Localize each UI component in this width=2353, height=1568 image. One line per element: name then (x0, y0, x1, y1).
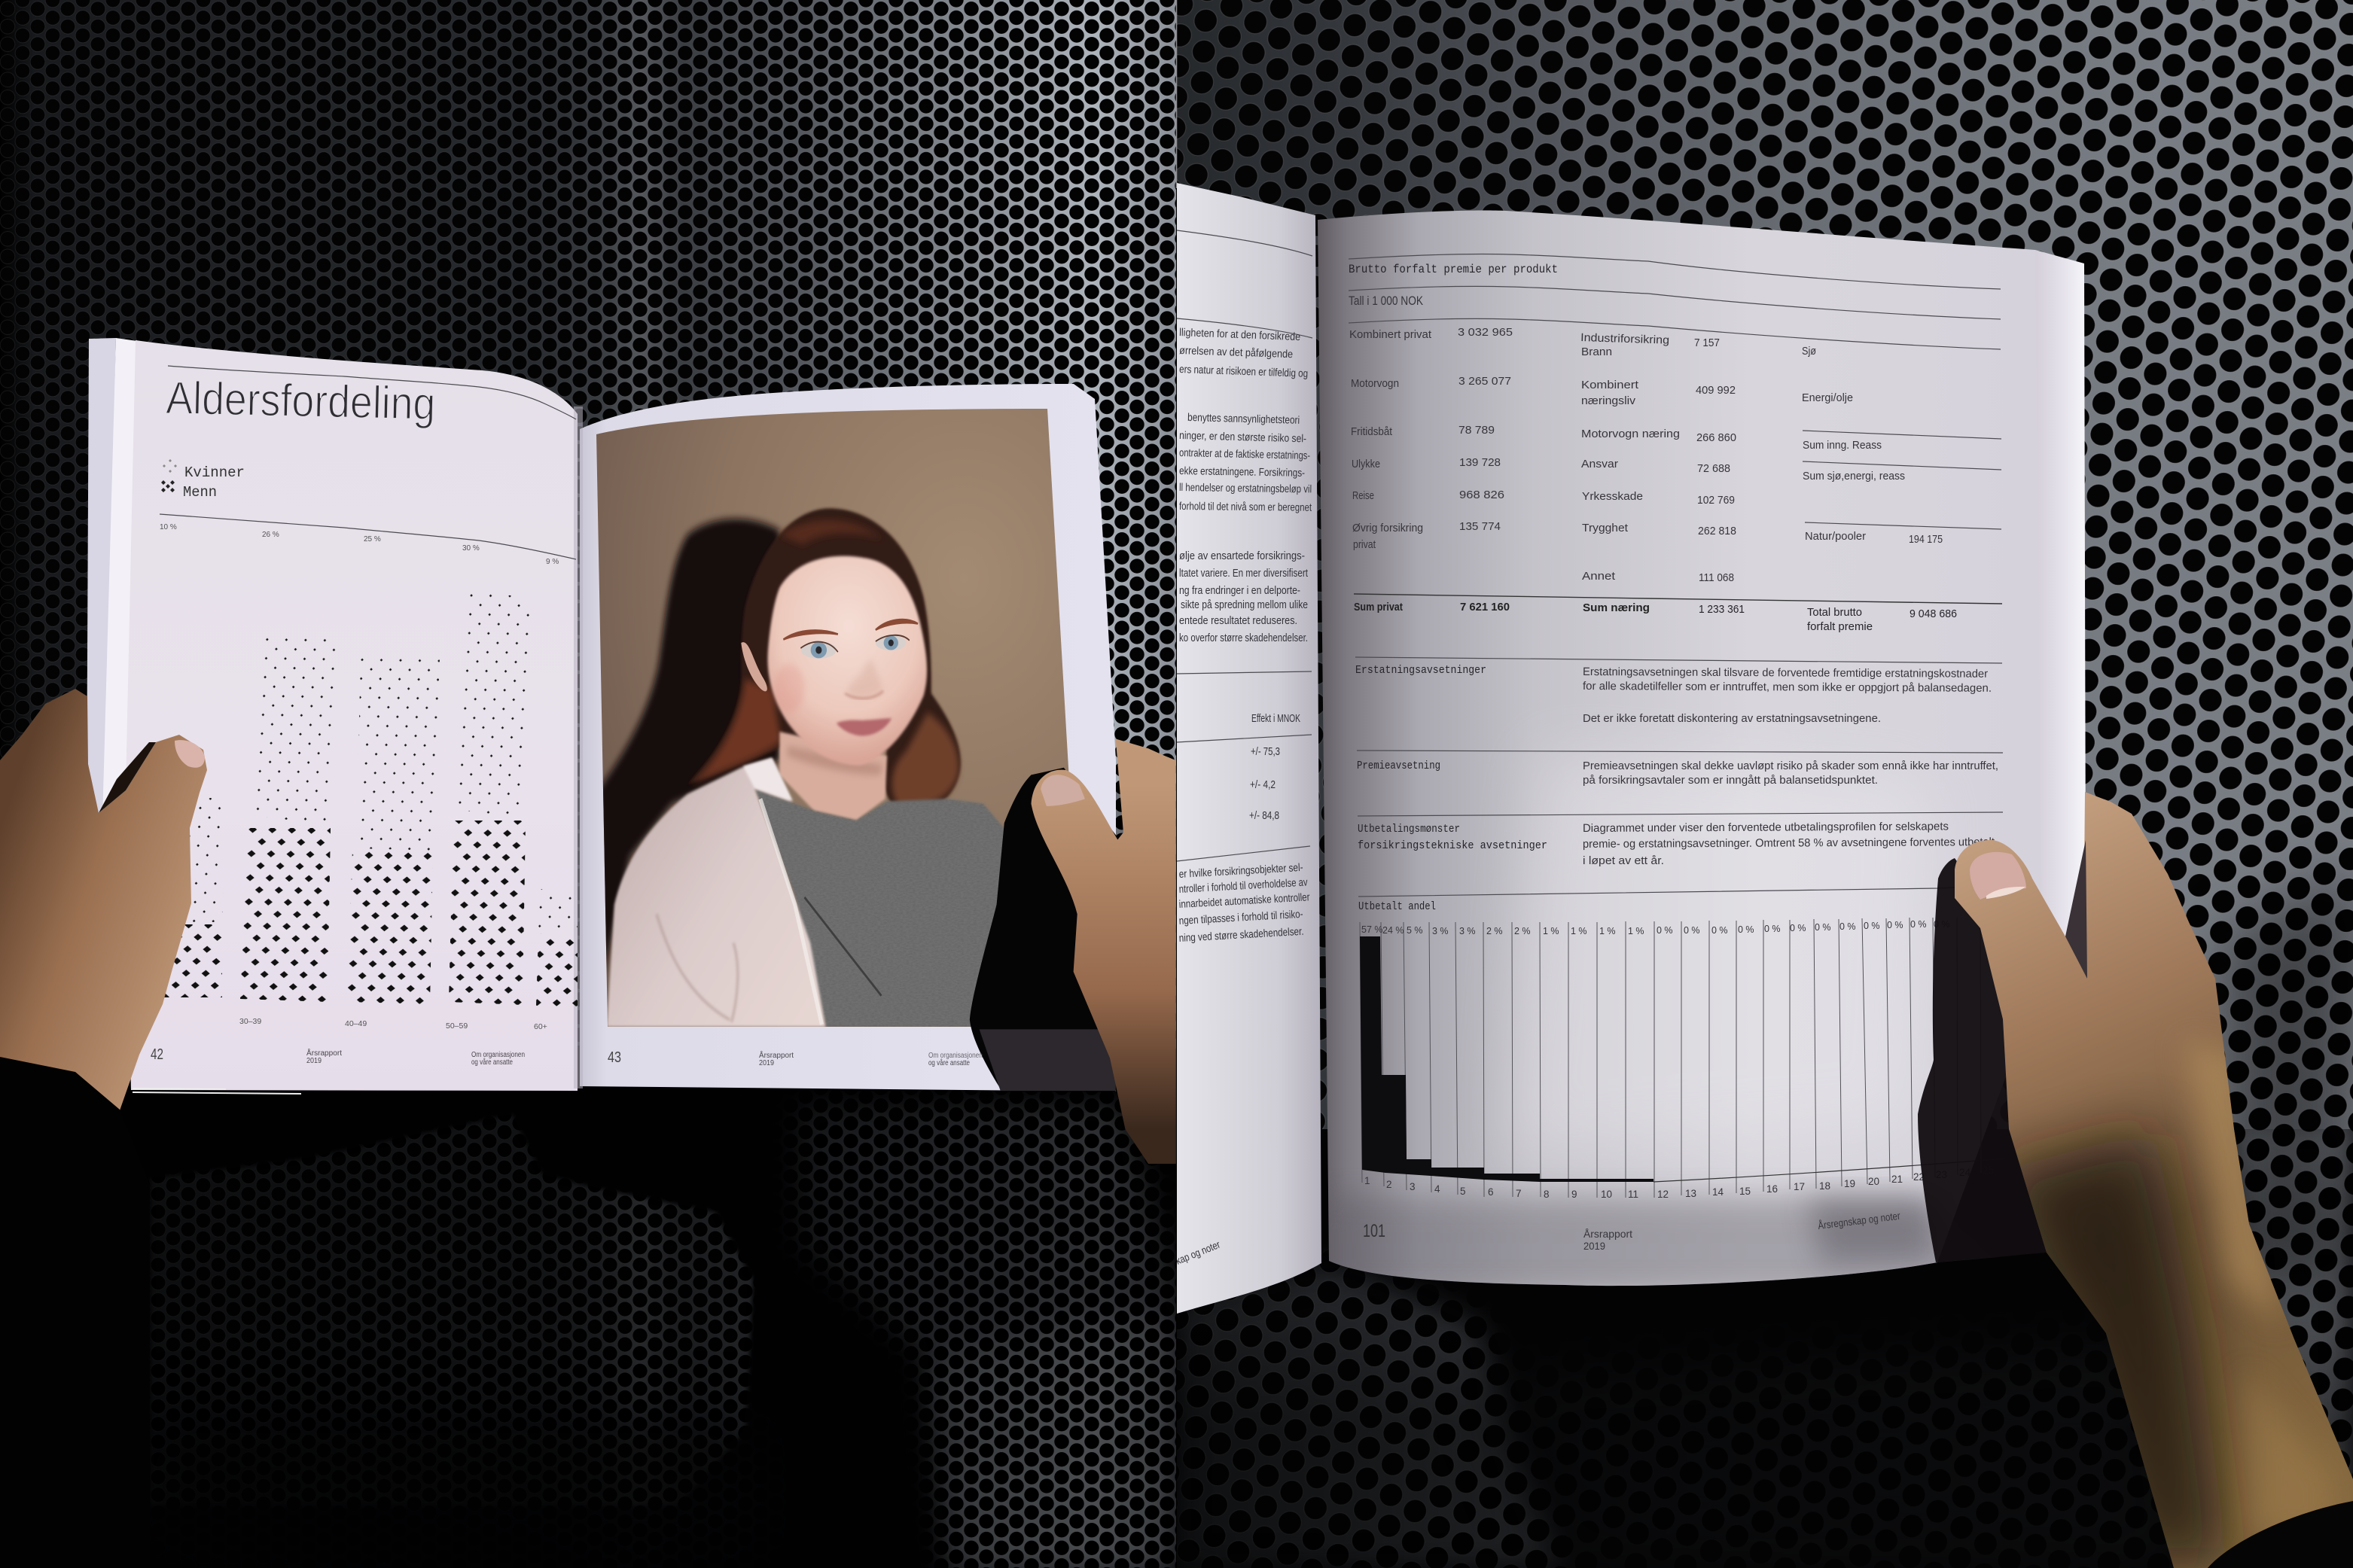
section: Premieavsetning: Premieavsetningen skal dekke uavløpt risiko på skader som ennå ikke har inntruffet, (1583, 760, 1998, 772)
thumbnail (175, 740, 205, 768)
hand: left hand holding book (0, 689, 207, 1568)
column: commercial products: 111 068 (1699, 571, 1734, 584)
year labels: 5 (1460, 1186, 1466, 1197)
text: risk paragraph fragments: ko overfor større skadehendelser. (1179, 632, 1308, 644)
share labels: 5 % (1407, 925, 1423, 936)
page stack right edge (2035, 250, 2086, 979)
gutter shadow (574, 406, 583, 1088)
column: commercial products: 1 233 361 (1699, 603, 1745, 616)
bar: 30-39 (240, 632, 338, 1002)
column: marine, energy, pools: forfalt premie (1807, 620, 1873, 633)
hand shadow on page 101 (1918, 858, 2047, 1262)
chart title: Utbetalt andel (1358, 900, 1436, 913)
background: perforated metal, right (1177, 0, 2353, 1568)
forearm shading (1988, 1039, 2334, 1568)
share labels: 0 % (1934, 919, 1950, 930)
share labels: 57 % (1361, 924, 1382, 935)
column: private products: Motorvogn (1351, 377, 1399, 390)
footer: page 101: Årsrapport (1583, 1228, 1632, 1240)
column: private products: Sum privat (1354, 601, 1403, 613)
table title: Brutto forfalt premie per produkt (1349, 263, 1558, 276)
section: Utbetalingsmønster: premie- og erstatningsavsetninger. Omtrent 58 % av avsetningene forventes utbetalt (1583, 836, 1995, 851)
table: effect in MNOK: +/- 75,3 (1251, 746, 1280, 758)
page bottom edge (133, 1088, 301, 1094)
table: effect in MNOK: Effekt i MNOK (1251, 713, 1300, 725)
year labels: 23 (1936, 1169, 1947, 1180)
legend (161, 459, 244, 496)
section: Utbetalingsmønster: Diagrammet under viser den forventede utbetalingsprofilen for selskapets (1583, 820, 1949, 835)
share labels: 0 % (1910, 919, 1927, 930)
bar: 60+ (536, 889, 578, 1006)
share labels: 0 % (1839, 921, 1856, 932)
finger fold behind page (2065, 840, 2087, 979)
text: risk paragraph fragments: ekke erstatningene. Forsikrings- (1179, 465, 1305, 480)
portrait photograph (580, 376, 1117, 1049)
column: marine, energy, pools: Energi/olje (1802, 391, 1853, 404)
table: effect in MNOK: +/- 4,2 (1250, 779, 1276, 791)
baseline right of bars (1654, 1158, 2005, 1182)
footer: page 43: Årsrapport (759, 1050, 794, 1060)
legend icon: Menn (161, 480, 175, 492)
bar: 50-59 (449, 589, 531, 1005)
heading: Aldersfordeling (166, 366, 576, 429)
column: private products: Reise (1352, 489, 1374, 502)
backdrop (580, 376, 1117, 1049)
arm and palm (1955, 792, 2353, 1568)
heading: Aldersfordeling: Aldersfordeling (166, 372, 436, 429)
column: commercial products: 266 860 (1696, 431, 1736, 444)
year labels: 6 (1488, 1186, 1494, 1198)
face (768, 556, 927, 766)
column: commercial products: Industriforsikring (1580, 331, 1669, 347)
table: effect in MNOK: +/- 84,8 (1249, 810, 1279, 822)
section: Premieavsetning (1357, 751, 2003, 787)
year labels: 13 (1685, 1188, 1696, 1199)
column: private products: 139 728 (1459, 456, 1501, 469)
vertical year lines (1360, 918, 1981, 1198)
column: private products: 968 826 (1459, 489, 1504, 501)
ear (741, 642, 767, 691)
neck (779, 732, 887, 821)
column: private products: 7 621 160 (1460, 601, 1510, 613)
footer: page 42: Årsrapport (306, 1048, 342, 1058)
sweater (754, 788, 1012, 1027)
share labels: 1 % (1628, 926, 1644, 936)
sleeve (0, 1057, 150, 1568)
year labels: 11 (1628, 1189, 1638, 1200)
section: Erstatningsavsetninger: for alle skadetilfeller som er inntruffet, men som ikke er oppgjort på balansedagen. (1583, 680, 1992, 695)
text: controls paragraph fragment: ning ved større skadehendelser. (1178, 926, 1304, 945)
column: private products: 135 774 (1459, 520, 1501, 533)
column: marine, energy, pools: Natur/pooler (1805, 530, 1866, 543)
hair (687, 508, 961, 812)
year labels: 14 (1712, 1186, 1724, 1198)
text: risk paragraph fragments: sikte på spredning mellom ulike (1181, 599, 1308, 611)
bar labels: 25 % (364, 535, 381, 543)
cardigan fold shading (657, 914, 738, 1022)
age axis labels: 50–59 (446, 1021, 468, 1031)
text: risk paragraph fragments: benyttes sannsynlighetsteori (1187, 412, 1300, 427)
collar (743, 758, 793, 801)
year labels: 2 (1386, 1179, 1392, 1190)
dot bar chart: age distribution (154, 514, 578, 1031)
book: previous page sliver (1174, 183, 1321, 1314)
bar: 40-49 (347, 654, 440, 1004)
panel: left photograph (0, 0, 1176, 1568)
footer: page 42: 42 (151, 1046, 163, 1063)
bar labels: 9 % (546, 558, 559, 566)
column: commercial products: 409 992 (1696, 384, 1736, 397)
hand: right hand holding portrait page (1031, 739, 1176, 1164)
section: Erstatningsavsetninger: Erstatningsavsetningen skal tilsvare de forventede fremtidige erstatningskostnader (1583, 665, 1988, 680)
share labels: 0 % (1764, 924, 1781, 934)
column: commercial products: Brann (1581, 346, 1612, 358)
thumb cast shadow (99, 742, 156, 813)
text: risk paragraph fragments: ørrelsen av det påfølgende (1179, 345, 1293, 361)
footer: page 101: 101 (1363, 1221, 1385, 1241)
age axis labels: 40–49 (345, 1019, 367, 1028)
black share bars (1360, 936, 1654, 1182)
year labels: 10 (1601, 1189, 1612, 1200)
footer: page 42: Om organisasjonen (471, 1051, 525, 1059)
cast shadow (599, 519, 779, 976)
column: commercial products: næringsliv (1581, 394, 1636, 407)
column: marine, energy, pools: Sum inng. Reass (1803, 439, 1882, 452)
legend: Kvinner (184, 464, 245, 481)
share labels: 0 % (1815, 922, 1831, 933)
year labels: 1 (1364, 1175, 1370, 1186)
section: Premieavsetning: på forsikringsavtaler som er inngått på balansetidspunktet. (1583, 774, 1878, 787)
sweater knit texture (754, 788, 1012, 1027)
text: risk paragraph fragments: ontrakter at de faktiske erstatnings- (1179, 447, 1310, 462)
panel: right photograph (1174, 0, 2353, 1568)
text: risk paragraph fragments: forhold til det nivå som er beregnet (1179, 501, 1312, 514)
column: commercial products: Ansvar (1581, 458, 1618, 470)
column: commercial products: 102 769 (1697, 494, 1735, 507)
footer: page 42: og våre ansatte (471, 1058, 513, 1067)
text: risk paragraph fragments: ltatet variere. En mer diversifisert (1179, 568, 1308, 580)
text: risk paragraph fragments: ninger, er den største risiko sel- (1179, 430, 1306, 445)
text: risk paragraph fragments: ll hendelser og erstatningsbeløp vil (1179, 482, 1312, 495)
table: effect in MNOK (1249, 713, 1300, 822)
year labels: 25 (1983, 1165, 1994, 1176)
column: marine, energy, pools: Sjø (1802, 345, 1816, 358)
cheek blush (774, 665, 804, 712)
footer: page 42 (151, 1046, 525, 1067)
column: private products (1349, 326, 1513, 613)
footer: page 43: Om organisasjonen (928, 1052, 983, 1060)
thumbnail (1970, 852, 2026, 900)
text: risk paragraph fragments: ers natur at risikoen er tilfeldig og (1179, 364, 1308, 380)
year labels: 15 (1739, 1186, 1751, 1197)
column: private products: 78 789 (1458, 424, 1495, 437)
bar chart: Utbetalt andel (1358, 885, 2005, 1200)
legend: Menn (183, 484, 217, 501)
bar labels: 26 % (262, 531, 279, 539)
text: risk paragraph fragments: entede resultatet reduseres. (1179, 615, 1297, 627)
page sheet (1318, 211, 2042, 1286)
text: controls paragraph fragment: er hvilke forsikringsobjekter sel- (1178, 862, 1303, 881)
column: commercial products (1580, 331, 1745, 616)
panel divider (1176, 0, 1178, 188)
age axis labels: 30–39 (239, 1017, 261, 1026)
section: Premieavsetning: Premieavsetning (1357, 760, 1440, 772)
column: private products: Øvrig forsikring (1352, 522, 1423, 534)
column: marine, energy, pools: Total brutto (1807, 606, 1862, 619)
age axis labels (239, 1017, 547, 1031)
table unit note: Tall i 1 000 NOK (1349, 294, 1424, 308)
age axis labels: 60+ (534, 1022, 547, 1031)
text: controls paragraph fragment: ngen tilpasses i forhold til risiko- (1178, 909, 1303, 927)
share labels: 0 % (1887, 920, 1903, 930)
year labels: 24 (1959, 1167, 1971, 1178)
year labels: 22 (1913, 1171, 1925, 1183)
share labels: 1 % (1599, 926, 1616, 936)
footer fragment: kap og noter (1174, 1238, 1222, 1267)
share labels: 3 % (1459, 926, 1476, 936)
thumbnail (1041, 775, 1085, 806)
table: gross premium by product (1349, 254, 2002, 633)
cardigan (607, 758, 826, 1027)
features: brows eyes nose lips (783, 620, 918, 736)
column: commercial products: Kombinert (1581, 379, 1639, 391)
year labels: 16 (1766, 1183, 1778, 1195)
section: Utbetalingsmønster (1358, 812, 2003, 867)
year labels (1364, 1165, 1994, 1200)
column: private products: Kombinert privat (1349, 328, 1432, 341)
year labels: 20 (1868, 1176, 1879, 1187)
share labels: 0 % (1657, 925, 1673, 936)
column: marine, energy, pools: 9 048 686 (1910, 607, 1957, 620)
section: Erstatningsavsetninger: Erstatningsavsetninger (1355, 664, 1486, 677)
column: marine, energy, pools: 194 175 (1909, 533, 1943, 546)
year labels: 21 (1891, 1174, 1903, 1185)
column: commercial products: Trygghet (1582, 522, 1629, 534)
year labels: 19 (1844, 1178, 1855, 1189)
footer: page 101 (1363, 1210, 1901, 1252)
section: Utbetalingsmønster: Utbetalingsmønster (1358, 823, 1460, 836)
share labels: 0 % (1738, 924, 1754, 935)
year labels: 7 (1516, 1188, 1522, 1199)
column: marine, energy, pools (1802, 345, 2001, 633)
section: Utbetalingsmønster: forsikringstekniske avsetninger (1358, 839, 1547, 852)
cardigan knit edge (760, 799, 821, 1025)
section: Erstatningsavsetninger (1355, 657, 2002, 725)
hand shadow on portrait page (970, 768, 1121, 1092)
column: private products: privat (1353, 538, 1376, 551)
footer: page 101: Årsregnskap og noter (1817, 1210, 1901, 1232)
paper stack, left page edge (87, 338, 137, 821)
text: controls paragraph fragment (1178, 862, 1310, 945)
nail tip highlight (1986, 887, 2025, 899)
page 43 (580, 384, 1116, 1092)
year labels: 17 (1794, 1181, 1805, 1192)
column: commercial products: 7 157 (1694, 336, 1720, 349)
column: private products: 3 032 965 (1458, 326, 1513, 339)
column: commercial products: Yrkesskade (1582, 490, 1643, 503)
bar labels: 30 % (462, 544, 480, 553)
text: controls paragraph fragment: innarbeidet automatiske kontroller (1178, 891, 1310, 911)
text: risk paragraph fragments: ølje av ensartede forsikrings- (1179, 550, 1305, 562)
section: Erstatningsavsetninger: Det er ikke foretatt diskontering av erstatningsavsetningene. (1583, 712, 1881, 725)
share labels: 1 % (1571, 926, 1587, 936)
background: perforated metal, left (0, 0, 1176, 1568)
bar labels: 10 % (160, 523, 177, 531)
book: left spread (87, 338, 1116, 1094)
column: commercial products: Sum næring (1583, 601, 1650, 614)
section: Utbetalingsmønster: i løpet av ett år. (1583, 854, 1664, 867)
page 42 (125, 340, 578, 1091)
legend icon: Kvinner (163, 459, 177, 473)
footer: page 43: 43 (608, 1049, 621, 1066)
share labels: 2 % (1514, 926, 1531, 936)
hand: right hand holding page 101 (1955, 792, 2353, 1568)
footer: page 43 (608, 1049, 983, 1067)
column: commercial products: 262 818 (1698, 525, 1736, 537)
book: page 101 (1318, 211, 2086, 1295)
share labels: 0 % (1864, 921, 1880, 931)
text: controls paragraph fragment: ntroller i forhold til overholdelse av (1178, 876, 1309, 896)
share labels: 3 % (1432, 926, 1449, 936)
column: private products: 3 265 077 (1458, 375, 1511, 388)
bar: 20-29 (154, 798, 226, 997)
column: marine, energy, pools: Sum sjø,energi, reass (1803, 470, 1905, 483)
sleeve (2208, 1501, 2353, 1568)
footer: page 43: og våre ansatte (928, 1058, 970, 1067)
share labels: 1 % (1543, 926, 1559, 936)
bar labels (160, 523, 559, 566)
year labels: 8 (1544, 1189, 1550, 1200)
share labels: 0 % (1790, 923, 1806, 933)
share labels: 2 % (1486, 926, 1503, 936)
year labels: 4 (1434, 1183, 1440, 1195)
share labels: 0 % (1684, 925, 1700, 936)
share labels: 0 % (1711, 925, 1728, 936)
column: commercial products: 72 688 (1697, 462, 1730, 475)
collar flap line (804, 897, 882, 996)
column: private products: Ulykke (1352, 458, 1380, 470)
year labels: 9 (1571, 1189, 1577, 1200)
text: risk paragraph fragments: lligheten for at den forsikrede (1179, 327, 1300, 343)
year labels: 12 (1657, 1189, 1669, 1200)
footer: page 43: 2019 (759, 1059, 774, 1067)
column: private products: Fritidsbåt (1351, 425, 1393, 438)
page lighting (1325, 753, 2033, 1295)
footer: page 42: 2019 (306, 1057, 322, 1065)
text: risk paragraph fragments: ng fra endringer i en delporte- (1179, 585, 1300, 597)
year labels: 3 (1410, 1181, 1416, 1192)
year labels: 18 (1819, 1180, 1830, 1192)
column: commercial products: Motorvogn næring (1581, 428, 1680, 440)
footer: page 101: 2019 (1583, 1240, 1605, 1252)
column: commercial products: Annet (1582, 570, 1616, 583)
share labels: 24 % (1382, 925, 1404, 936)
text: risk paragraph fragments (1179, 327, 1312, 644)
share labels (1361, 919, 1950, 936)
